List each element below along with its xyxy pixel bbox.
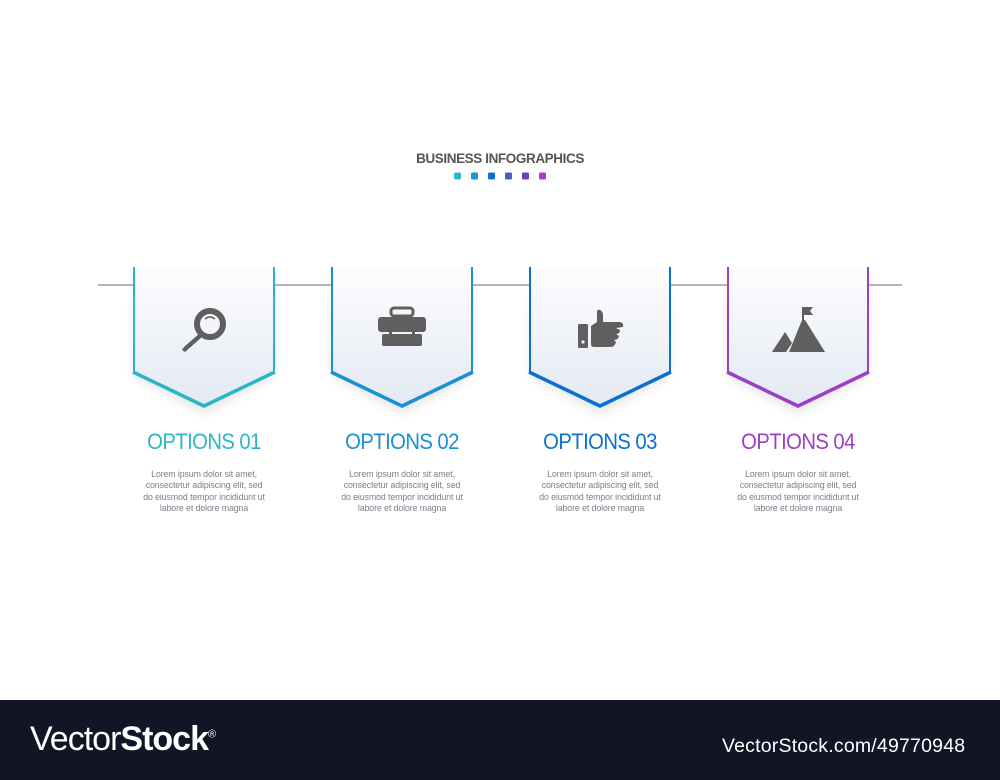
text: consectetur adipiscing elit, sed <box>542 480 658 490</box>
option 1 text <box>143 429 265 513</box>
footer bar <box>0 700 1000 780</box>
icon: mountain flag <box>772 307 825 352</box>
text: do eiusmod tempor incididunt ut <box>539 492 661 502</box>
text: labore et dolore magna <box>160 503 248 513</box>
text: OPTIONS 04 <box>741 429 855 454</box>
text: do eiusmod tempor incididunt ut <box>143 492 265 502</box>
footer url: VectorStock.com/49770948 <box>722 735 965 757</box>
card 1 <box>133 267 275 412</box>
icon: briefcase <box>378 308 426 346</box>
option 2 text <box>341 429 463 513</box>
text: consectetur adipiscing elit, sed <box>740 480 856 490</box>
text: consectetur adipiscing elit, sed <box>344 480 460 490</box>
text: OPTIONS 01 <box>147 429 261 454</box>
card 2 <box>331 267 473 412</box>
icon: thumbs up <box>578 310 623 348</box>
text: labore et dolore magna <box>556 503 644 513</box>
text: OPTIONS 02 <box>345 429 459 454</box>
text: Lorem ipsum dolor sit amet, <box>547 469 653 479</box>
card 4 <box>727 267 869 412</box>
color dots <box>454 172 546 180</box>
icon: magnifier <box>182 311 223 352</box>
option 3 text <box>539 429 661 513</box>
text: labore et dolore magna <box>754 503 842 513</box>
text: Lorem ipsum dolor sit amet, <box>745 469 851 479</box>
card 3 <box>529 267 671 412</box>
title: BUSINESS INFOGRAPHICS <box>416 151 584 166</box>
footer logo: VectorStock® <box>30 720 215 758</box>
text: Lorem ipsum dolor sit amet, <box>349 469 455 479</box>
text: Lorem ipsum dolor sit amet, <box>151 469 257 479</box>
option 4 text <box>737 429 859 513</box>
text: consectetur adipiscing elit, sed <box>146 480 262 490</box>
text: do eiusmod tempor incididunt ut <box>341 492 463 502</box>
text: do eiusmod tempor incididunt ut <box>737 492 859 502</box>
text: labore et dolore magna <box>358 503 446 513</box>
text: OPTIONS 03 <box>543 429 657 454</box>
